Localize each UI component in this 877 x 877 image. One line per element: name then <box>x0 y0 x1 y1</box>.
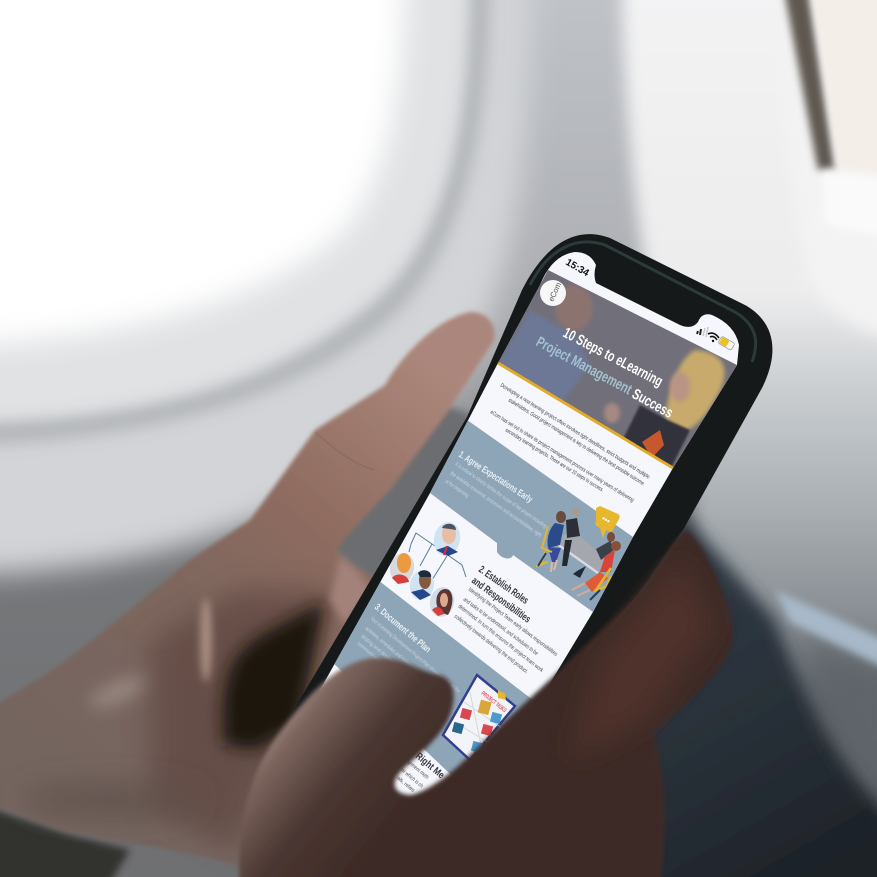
man: shirt <box>498 310 590 405</box>
status bar time: 15:34 <box>564 257 591 279</box>
phone body <box>279 234 772 780</box>
shadow in the palm crease <box>223 600 325 750</box>
small window: sill <box>822 172 877 238</box>
section 4 text <box>395 751 446 794</box>
left hand: shading and highlights <box>20 432 375 850</box>
section 3 text: Your eLearning Development Project Plan should include all the <box>369 616 461 694</box>
small window at upper right <box>775 0 877 340</box>
section 2 text <box>453 564 558 675</box>
person: woman in blue <box>547 511 566 572</box>
status bar icons <box>697 327 735 350</box>
section 1 band <box>430 415 633 612</box>
sticky: teal <box>452 722 464 734</box>
section 4 text: tor which is ch <box>399 767 424 790</box>
section 2 text: and tasks to be understood, and schedules to be <box>462 597 539 657</box>
hands in photo <box>604 403 620 423</box>
header photo backdrop <box>498 270 737 468</box>
section 2 text: collectively towards delivering the end product. <box>453 614 529 675</box>
section 4 text: ials, relies <box>395 775 416 794</box>
logo: eCom <box>547 281 563 303</box>
avatar: dark-haired woman <box>430 587 454 617</box>
palm depth shading <box>150 590 330 850</box>
header photo <box>498 270 737 468</box>
section 1 text: the available resources, processes and accountabilities, right <box>449 471 543 539</box>
sticky: yellow <box>478 700 492 715</box>
section 1 text: It is critical to clearly define the scope of the project including <box>454 462 547 530</box>
section 4 text: alignment meth <box>403 757 430 781</box>
window frame: shadow band <box>0 0 490 445</box>
battery <box>718 336 735 350</box>
section 3 text: activities, schedules and milestones for development, <box>364 626 444 695</box>
org chart <box>387 520 466 619</box>
sticky: blue <box>490 712 502 724</box>
chair left <box>536 526 552 566</box>
section 2 text: Identifying the Project Team early allows responsibilities <box>467 587 558 658</box>
small window: frame surround <box>775 0 877 340</box>
person: man on right <box>573 532 615 578</box>
title: Project Management <box>533 334 635 398</box>
section 1 text: at the beginning. <box>444 479 470 500</box>
left hand: sleeve <box>0 805 130 877</box>
sticky: blue lower <box>471 741 483 753</box>
sticky: red lower <box>481 724 493 736</box>
woman: face <box>670 372 690 402</box>
window frame: outer ring <box>0 0 531 575</box>
avatar: manager <box>434 522 460 556</box>
wifi <box>708 333 719 340</box>
woman: orange top <box>642 430 664 458</box>
second finger <box>330 556 372 625</box>
intro text: Developing a new learning project often involves tight deadlines, strict budgets and multiple <box>499 383 651 480</box>
connector lines <box>409 533 466 580</box>
logo <box>540 280 566 306</box>
header divider <box>498 363 673 468</box>
sticky: top pin <box>498 690 506 700</box>
board frame <box>443 675 515 760</box>
left hand <box>0 312 494 868</box>
intro text: secondary learning projects. These are our 10 steps to success. <box>504 428 605 494</box>
woman: hair <box>662 350 725 434</box>
speech bubble: ••• <box>600 514 612 526</box>
sticky: red <box>460 708 472 720</box>
window frame: inner ring <box>0 0 465 420</box>
section 3 text: 3. Document the Plan <box>372 602 433 655</box>
small window: glass <box>812 0 877 176</box>
section 3 text <box>356 602 461 695</box>
screen background <box>320 252 739 798</box>
finger crease <box>315 432 375 470</box>
board grid <box>455 692 505 745</box>
illustration: meeting around a table <box>536 506 621 600</box>
front hand: thumb and fingers <box>239 530 733 877</box>
right edge shading below the strip <box>805 640 877 800</box>
project tasks board <box>443 675 515 760</box>
avatar: man in suit <box>410 570 434 600</box>
man: head <box>555 285 593 331</box>
lower palm shadow <box>20 782 200 818</box>
knuckle highlight <box>200 598 212 682</box>
signal <box>697 329 701 335</box>
front hand: finger tone on the right <box>570 560 715 760</box>
section 1 text: 1. Agree Expectations Early <box>456 449 535 506</box>
woman: jacket <box>620 405 690 470</box>
chair right <box>596 568 611 590</box>
section 2 text: determined. In turn this ensures the project team work <box>457 604 544 674</box>
section 3 text: communications and reviews <box>356 641 406 684</box>
dark seat area at lower right <box>600 510 877 877</box>
section 1 text <box>444 449 547 539</box>
light strip on the panel <box>775 590 877 668</box>
intro text: eCom has set out to share its project management process over many years of delivering <box>489 410 635 504</box>
section 3 text: testing and deployment of the project <box>360 634 425 690</box>
phone case <box>279 234 772 780</box>
section 2 text: 2. Establish Roles <box>476 564 531 607</box>
phone screen <box>320 252 739 798</box>
title: 10 Steps to eLearning <box>560 324 666 390</box>
intro text: stakeholders. Good project management is key to delivering the best possible outcome. <box>507 398 646 488</box>
section 4 text: Right Me <box>413 751 446 781</box>
phone rim highlight <box>530 242 756 362</box>
avatar: orange-haired person <box>390 553 414 584</box>
title: Success <box>629 386 676 422</box>
table <box>560 534 604 572</box>
bright window <box>0 0 405 345</box>
section 2 text: and Responsibilities <box>469 575 533 626</box>
palm highlight <box>86 669 150 715</box>
dark gap behind the fingers <box>330 405 485 595</box>
person: man behind <box>562 507 580 566</box>
person: woman in red <box>572 541 621 596</box>
right wall panel <box>622 0 877 830</box>
board heading: PROJECT TASKS <box>480 691 507 714</box>
small window: dark reveal <box>784 0 835 170</box>
section 3 band <box>334 582 532 775</box>
